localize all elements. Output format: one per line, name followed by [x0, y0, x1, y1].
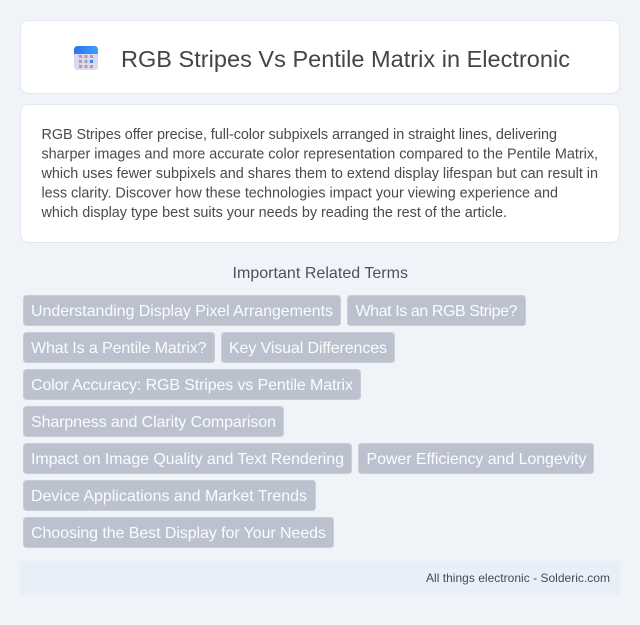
footer — [20, 561, 620, 595]
chip: key visual differences: Key Visual Differences — [229, 340, 387, 357]
panel: title header — [20, 20, 620, 94]
icon: pixel grid calendar — [74, 46, 98, 70]
heading: important related terms: Important Related Terms — [232, 265, 408, 282]
chip: device applications: Device Applications and Market Trends — [31, 488, 307, 505]
chip: key visual differences — [222, 332, 394, 362]
chip: color accuracy: Color Accuracy: RGB Stripes vs Pentile Matrix — [31, 377, 353, 394]
text block: description: which display type best suits your needs by reading the rest of the article. — [40, 205, 507, 221]
chip: power efficiency: Power Efficiency and Longevity — [366, 451, 586, 468]
text block: description — [40, 127, 598, 221]
chip: understanding display pixel arrangements — [24, 296, 340, 326]
chip: what is a pentile matrix: What Is a Pentile Matrix? — [31, 340, 207, 357]
text block: description: sharper images and more accurate color representation compared to the Pentile Matrix, — [42, 146, 598, 162]
chip: device applications — [24, 480, 316, 510]
panel: description — [20, 104, 620, 242]
text block: description: less clarity. Discover how these technologies impact your viewing experience and — [42, 186, 558, 202]
chip: power efficiency — [358, 444, 594, 474]
chip: impact on image quality: Impact on Image Quality and Text Rendering — [31, 451, 344, 468]
chip: sharpness and clarity: Sharpness and Clarity Comparison — [31, 414, 276, 431]
chip: impact on image quality — [24, 444, 352, 474]
chip: choosing the best display — [24, 518, 334, 548]
chip: what is an RGB stripe: What Is an RGB Stripe? — [356, 303, 518, 320]
chip: choosing the best display: Choosing the Best Display for Your Needs — [31, 525, 326, 542]
chip group: related terms — [24, 296, 594, 548]
title: RGB Stripes Vs Pentile Matrix in Electronic — [121, 46, 570, 72]
footer credit: All things electronic - Solderic.com — [426, 571, 610, 585]
chip: what is a pentile matrix — [24, 332, 214, 362]
chip: what is an RGB stripe — [348, 296, 526, 326]
chip: sharpness and clarity — [24, 406, 284, 436]
text block: description: RGB Stripes offer precise, full-color subpixels arranged in straight lines, delivering — [42, 127, 557, 143]
chip: color accuracy — [24, 370, 360, 400]
text block: description: which uses fewer subpixels and shares them to extend display lifespan but can result in — [40, 166, 598, 182]
chip: understanding display pixel arrangements: Understanding Display Pixel Arrangements — [31, 303, 333, 320]
